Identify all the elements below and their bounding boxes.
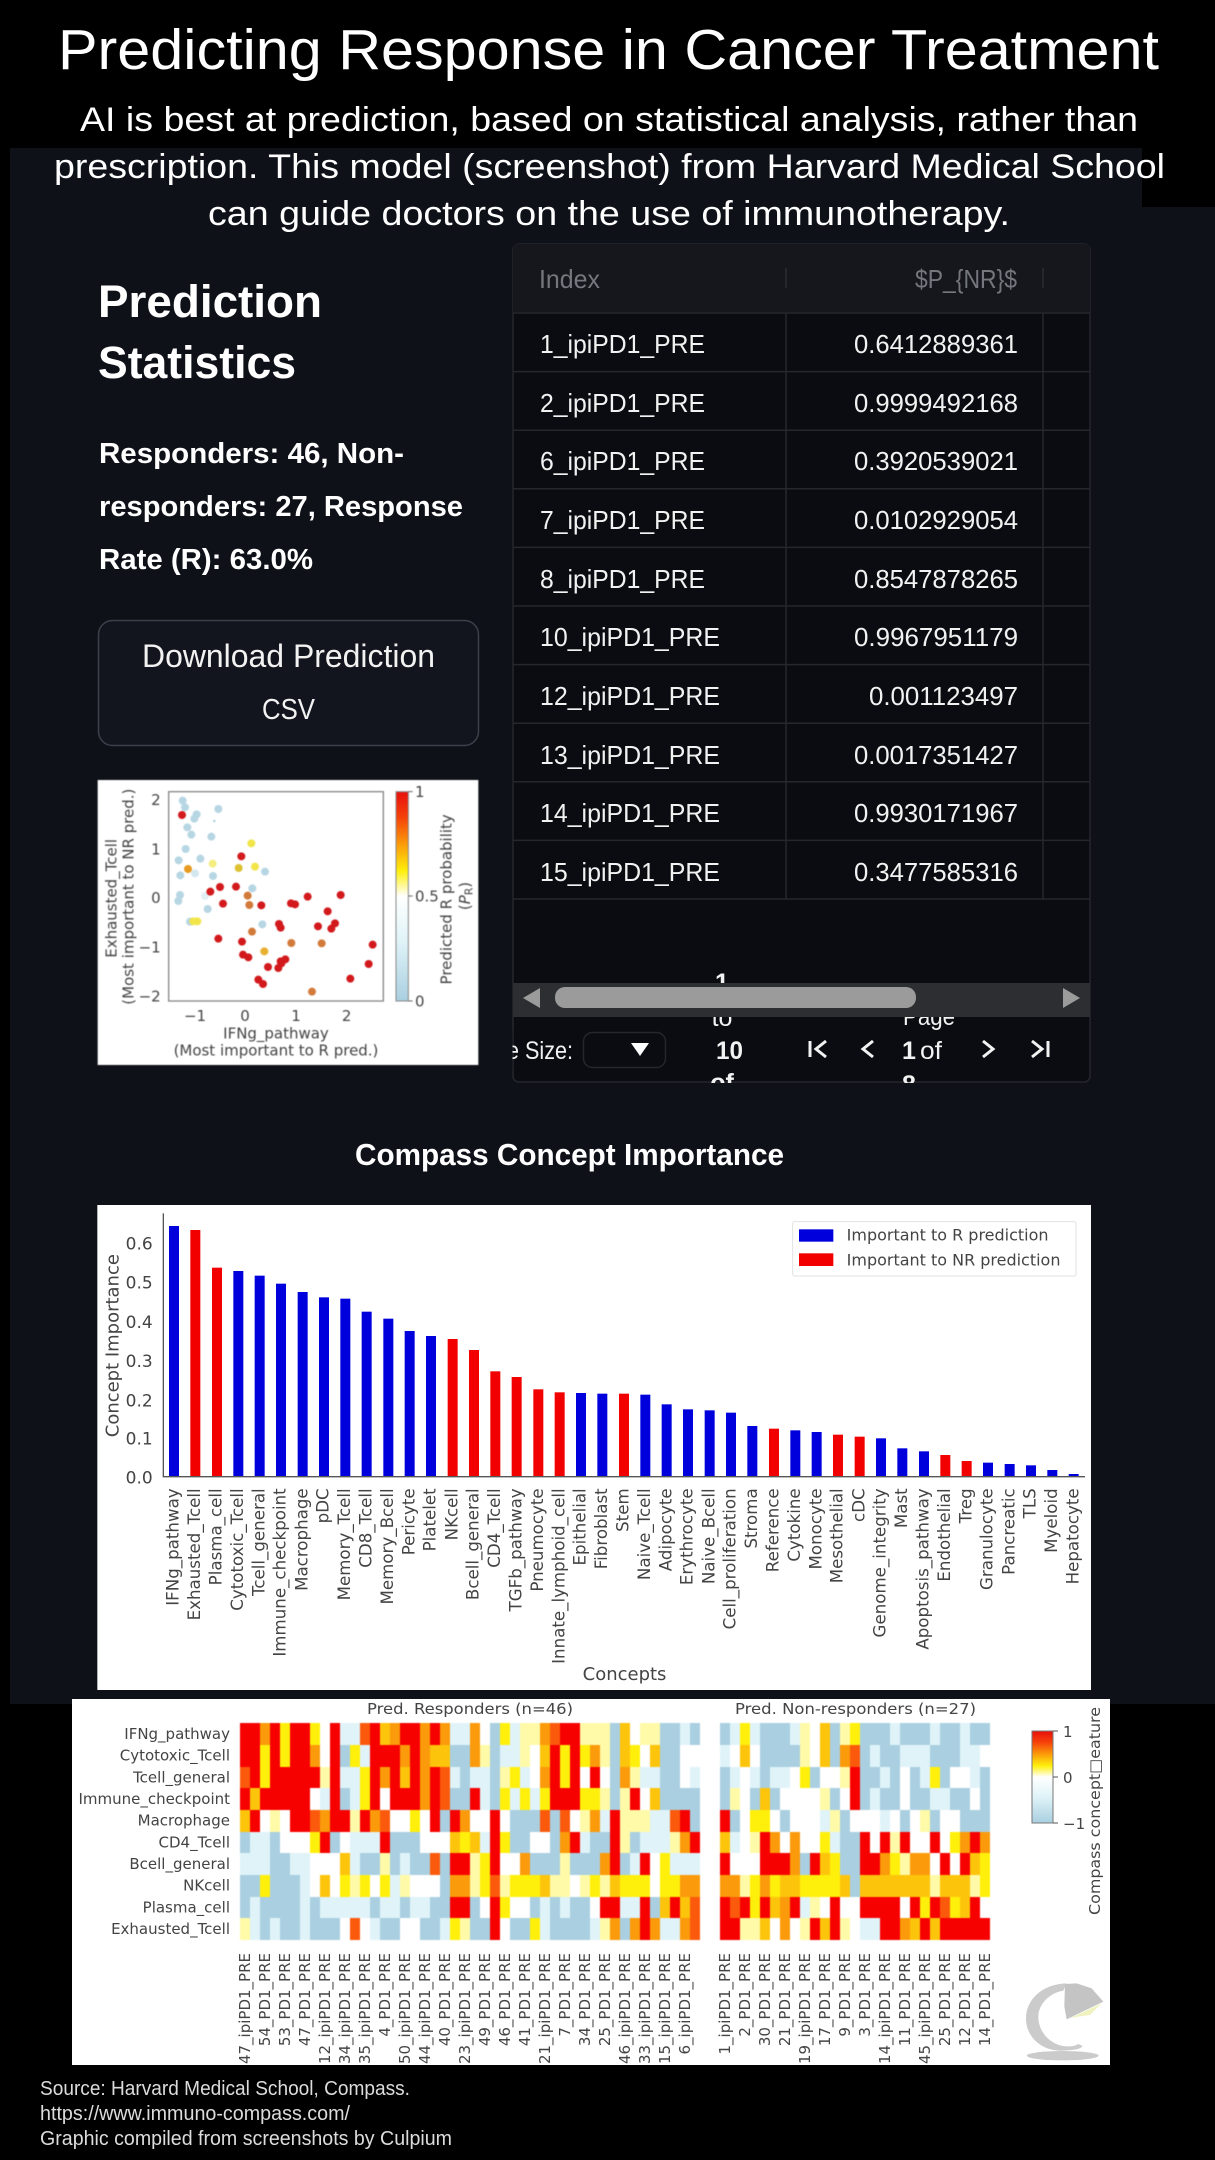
concept labels: Cytotoxic_Tcell	[228, 1488, 248, 1611]
scatter axis tick labels: 0	[240, 1007, 250, 1025]
heatmap background and labels	[72, 1699, 1110, 2065]
pagination controls: of	[920, 1037, 942, 1065]
heatmap column labels: responders: 34_PD1_PRE	[576, 1953, 595, 2046]
heatmap group titles	[367, 1700, 976, 1718]
source footer: Graphic compiled from screenshots by Culpium	[40, 2128, 452, 2150]
heatmap column labels: responders: 50_ipiPD1_PRE	[396, 1953, 415, 2064]
button: download prediction csv	[98, 620, 478, 746]
concept labels: Macrophage	[292, 1488, 311, 1591]
pagination controls: 8	[902, 1071, 916, 1099]
bar chart axes: Concept Importance	[102, 1254, 123, 1437]
source footer: https://www.immuno-compass.com/	[40, 2103, 350, 2125]
heatmap: predicted responders	[239, 1722, 701, 1941]
pagination controls: e Size:	[507, 1037, 573, 1065]
concept labels: Pneumocyte	[528, 1488, 547, 1592]
concept labels: Granulocyte	[978, 1488, 997, 1590]
heading: compass concept importance: Compass Concept Importance	[355, 1137, 784, 1172]
concept labels: IFNg_pathway	[164, 1488, 184, 1606]
concept labels: pDC	[314, 1488, 333, 1523]
concept labels: Hepatocyte	[1063, 1488, 1082, 1584]
heatmap row labels: Macrophage	[138, 1812, 230, 1830]
heatmap row labels: Plasma_cell	[143, 1898, 230, 1917]
scatter axis tick labels: 1	[151, 840, 161, 858]
table rows: 6_ipiPD1_PRE	[540, 446, 705, 476]
heatmap row labels: Bcell_general	[129, 1855, 230, 1874]
bar chart axes: 0.3	[126, 1352, 153, 1372]
heading: prediction statistics: Statistics	[98, 337, 296, 388]
table panel: prediction values	[500, 244, 1090, 1099]
scatter colorbar: R	[463, 887, 476, 895]
subtitle: AI is best at prediction, based on statistical analysis, rather than	[80, 101, 1138, 139]
heatmap column labels: non-responders: 14_ipiPD1_PRE	[876, 1953, 895, 2064]
concept labels: Endothelial	[935, 1488, 954, 1582]
bar chart axes: 0.5	[126, 1274, 153, 1294]
heatmap column labels: responders: 12_ipiPD1_PRE	[316, 1953, 335, 2064]
heatmap column labels: responders: 40_PD1_PRE	[436, 1953, 455, 2046]
concept labels: Mesothelial	[828, 1488, 847, 1583]
table rows: 0.3477585316	[854, 857, 1018, 887]
table header: Index	[539, 264, 600, 294]
heatmap column labels: non-responders: 19_ipiPD1_PRE	[796, 1953, 815, 2064]
black corner block top right	[1142, 148, 1215, 207]
heatmap row labels: NKcell	[183, 1877, 230, 1895]
scatter colorbar: (P	[456, 895, 474, 910]
heatmap column labels: responders: 33_ipiPD1_PRE	[636, 1953, 655, 2064]
bar chart axes: 0.4	[126, 1313, 153, 1333]
heatmap column labels: non-responders: 25_PD1_PRE	[936, 1953, 955, 2046]
concept labels: Plasma_cell	[207, 1488, 227, 1585]
scatter colorbar: )	[456, 882, 474, 888]
concept labels: CD4_Tcell	[485, 1488, 505, 1568]
concept labels: Naive_Bcell	[699, 1488, 719, 1584]
pagination controls: 1	[902, 1037, 916, 1065]
heatmap column labels: responders	[236, 1953, 695, 2064]
concept labels: Epithelial	[571, 1488, 590, 1565]
table rows: 1_ipiPD1_PRE	[540, 329, 705, 359]
table header	[513, 244, 1090, 313]
table rows: 7_ipiPD1_PRE	[540, 505, 705, 535]
heatmap column labels: responders: 35_ipiPD1_PRE	[356, 1953, 375, 2064]
heatmap column labels: non-responders: 30_PD1_PRE	[756, 1953, 775, 2046]
heading: prediction statistics: Prediction	[98, 276, 322, 327]
scatter axis tick labels: 1	[291, 1007, 301, 1025]
table rows: 0.8547878265	[854, 564, 1018, 594]
heatmap colorbar: 0	[1063, 1769, 1073, 1787]
concept labels: Pancreatic	[999, 1488, 1018, 1575]
text block: response statistics: Rate (R): 63.0%	[99, 544, 313, 576]
heatmap column labels: non-responders: 1_ipiPD1_PRE	[716, 1953, 735, 2054]
concept labels: Myeloid	[1042, 1488, 1061, 1553]
heatmap column labels: responders: 41_PD1_PRE	[516, 1953, 535, 2046]
bar chart legend	[793, 1222, 1076, 1276]
button: download prediction csv: Download Prediction	[142, 638, 435, 674]
concept labels: TGFb_pathway	[506, 1488, 526, 1612]
text block: response statistics	[99, 438, 463, 576]
concept labels: Immune_checkpoint	[271, 1488, 291, 1657]
heatmap row labels: IFNg_pathway	[124, 1725, 230, 1744]
heatmap column labels: non-responders: 11_PD1_PRE	[896, 1953, 915, 2046]
heatmap row labels: Cytotoxic_Tcell	[120, 1747, 230, 1766]
table rows: 0.3920539021	[854, 446, 1018, 476]
table rows: 8_ipiPD1_PRE	[540, 564, 705, 594]
heatmap group titles: Pred. Non-responders (n=27)	[735, 1700, 976, 1718]
concept labels: Reference	[764, 1488, 783, 1572]
table rows: 15_ipiPD1_PRE	[540, 857, 720, 887]
pagination controls: to	[712, 1004, 732, 1032]
subtitle: prescription. This model (screenshot) from Harvard Medical School	[54, 148, 1165, 186]
scatter colorbar	[396, 783, 476, 1010]
text block: response statistics: responders: 27, Response	[99, 491, 463, 523]
concept labels: Bcell_general	[464, 1488, 484, 1600]
scatter axis tick labels: −1	[184, 1007, 206, 1025]
heatmap column labels: non-responders: 14_PD1_PRE	[976, 1953, 995, 2046]
scatter axis tick labels: −2	[139, 988, 161, 1006]
concept labels: Apoptosis_pathway	[914, 1488, 934, 1650]
concept labels: Fibroblast	[592, 1488, 611, 1569]
concept labels: Stem	[614, 1488, 633, 1532]
table rows: 0.9930171967	[854, 798, 1018, 828]
heatmap column labels: responders: 54_PD1_PRE	[256, 1953, 275, 2046]
heatmap column labels: non-responders: 21_PD1_PRE	[776, 1953, 795, 2046]
pagination controls: of	[710, 1069, 734, 1097]
pagination controls: 10	[716, 1037, 743, 1065]
heatmap column labels: responders: 47_ipiPD1_PRE	[236, 1953, 255, 2064]
table rows: 0.9999492168	[854, 388, 1018, 418]
table rows	[540, 329, 1018, 887]
table rows: 12_ipiPD1_PRE	[540, 681, 720, 711]
concept labels: Stroma	[742, 1488, 761, 1549]
heatmap column labels: responders: 7_PD1_PRE	[556, 1953, 575, 2037]
heatmap row labels	[78, 1725, 230, 1939]
heatmap column labels: responders: 6_ipiPD1_PRE	[676, 1953, 695, 2054]
pagination controls	[500, 969, 1090, 1099]
heatmap column labels: non-responders: 12_PD1_PRE	[956, 1953, 975, 2046]
heatmap column labels: responders: 23_ipiPD1_PRE	[456, 1953, 475, 2064]
heatmap group titles: Pred. Responders (n=46)	[367, 1700, 573, 1718]
scatter axis tick labels: −1	[139, 939, 161, 957]
scatter colorbar: 0	[415, 992, 425, 1010]
scatter axis tick labels: 2	[342, 1007, 351, 1025]
table rows: 2_ipiPD1_PRE	[540, 388, 705, 418]
scatter colorbar: 1	[415, 783, 425, 801]
scatter axis titles	[103, 789, 378, 1060]
bar chart axes	[102, 1213, 1085, 1685]
scatter axis titles: Exhausted_Tcell	[103, 839, 122, 958]
heatmap column labels: responders: 25_PD1_PRE	[596, 1953, 615, 2046]
concept labels: Treg	[956, 1488, 975, 1524]
heatmap colorbar: 1	[1063, 1723, 1073, 1741]
pagination controls: Page	[903, 1003, 955, 1031]
concept labels: Memory_Tcell	[335, 1488, 355, 1600]
scatter axis tick labels: 0	[151, 889, 161, 907]
text block: response statistics: Responders: 46, Non-	[99, 438, 404, 470]
heatmap colorbar	[1032, 1707, 1104, 1915]
heatmap column labels: responders: 46_PD1_PRE	[496, 1953, 515, 2046]
heatmap column labels: non-responders: 2_PD1_PRE	[736, 1953, 755, 2037]
heatmap column labels: non-responders: 3_PD1_PRE	[856, 1953, 875, 2037]
heatmap column labels: responders: 44_ipiPD1_PRE	[416, 1953, 435, 2064]
concept labels: Cytokine	[785, 1488, 804, 1562]
concept labels: cDC	[849, 1488, 868, 1522]
heatmap column labels: non-responders: 45_ipiPD1_PRE	[916, 1953, 935, 2064]
bar chart axes: Concepts	[583, 1664, 666, 1685]
icon: desk lamp logo	[1026, 1983, 1103, 2060]
heading: prediction statistics	[98, 276, 322, 388]
scatter axis titles: (Most important to R pred.)	[174, 1042, 378, 1060]
dark dashboard background panel	[10, 148, 1215, 1704]
concept labels: Monocyte	[806, 1488, 825, 1569]
button: download prediction csv: CSV	[262, 694, 316, 726]
concept labels: Cell_proliferation	[721, 1488, 741, 1629]
concept labels: CD8_Tcell	[356, 1488, 376, 1568]
bar chart axes: 0.1	[126, 1430, 153, 1450]
heatmap column labels: responders: 53_PD1_PRE	[276, 1953, 295, 2046]
bars	[169, 1226, 1079, 1477]
concept labels: TLS	[1021, 1488, 1040, 1519]
bar chart legend: Important to R prediction	[847, 1226, 1049, 1245]
table header: $P_{NR}$	[915, 264, 1017, 294]
heatmap column labels: responders: 47_PD1_PRE	[296, 1953, 315, 2046]
source footer	[40, 2078, 452, 2150]
heatmap column labels: responders: 34_ipiPD1_PRE	[336, 1953, 355, 2064]
heatmap column labels: non-responders: 9_PD1_PRE	[836, 1953, 855, 2037]
bar chart legend: Important to NR prediction	[847, 1251, 1060, 1270]
bar chart axes: 0.0	[126, 1469, 153, 1489]
subtitle: can guide doctors on the use of immunotherapy.	[208, 195, 1010, 233]
subtitle	[54, 101, 1165, 233]
scatter colorbar: 0.5	[415, 887, 439, 905]
scatter axis tick labels: 2	[151, 791, 161, 809]
table rows: 0.0017351427	[854, 740, 1018, 770]
concept labels: Genome_integrity	[871, 1488, 891, 1637]
concept labels: Naive_Tcell	[635, 1488, 655, 1580]
concept labels: Mast	[892, 1488, 911, 1528]
concept labels: Erythrocyte	[678, 1488, 697, 1585]
scatter axis titles: IFNg_pathway	[223, 1024, 329, 1043]
title: Predicting Response in Cancer Treatment	[58, 18, 1159, 82]
table rows: 10_ipiPD1_PRE	[540, 622, 720, 652]
concept labels: Pericyte	[399, 1488, 418, 1555]
concept labels: Innate_lymphoid_cell	[549, 1488, 569, 1664]
concept labels: Adipocyte	[656, 1488, 675, 1571]
heatmap colorbar: −1	[1063, 1815, 1085, 1833]
table rows: 0.9967951179	[854, 622, 1018, 652]
concept labels: NKcell	[442, 1488, 461, 1540]
scatter colorbar: Predicted R probability	[438, 814, 456, 984]
scatter plot: predicted R probability	[98, 780, 478, 1065]
bar chart axes: 0.6	[126, 1235, 153, 1255]
concept labels: Platelet	[421, 1488, 440, 1551]
concept labels: Exhausted_Tcell	[185, 1488, 205, 1620]
concept labels: Tcell_general	[249, 1488, 269, 1597]
source footer: Source: Harvard Medical School, Compass.	[40, 2078, 410, 2100]
table rows: 0.0102929054	[854, 505, 1018, 535]
scatter points	[174, 797, 377, 996]
table rows: 0.6412889361	[854, 329, 1018, 359]
scatter axis tick labels	[139, 791, 351, 1025]
heatmap row labels: Exhausted_Tcell	[111, 1920, 230, 1939]
heatmap column labels: responders: 21_ipiPD1_PRE	[536, 1953, 555, 2064]
heatmap column labels: responders: 46_ipiPD1_PRE	[616, 1953, 635, 2064]
heatmap column labels: responders: 49_PD1_PRE	[476, 1953, 495, 2046]
heatmap column labels: responders: 15_ipiPD1_PRE	[656, 1953, 675, 2064]
bar chart axes: 0.2	[126, 1391, 153, 1411]
horizontal scrollbar	[513, 983, 1090, 1017]
heatmap row labels: CD4_Tcell	[158, 1833, 230, 1852]
heatmap row labels: Immune_checkpoint	[78, 1790, 230, 1809]
heatmap: predicted non-responders	[719, 1722, 991, 1941]
concept labels: Memory_Bcell	[378, 1488, 398, 1604]
concept labels	[164, 1488, 1082, 1664]
table rows: 14_ipiPD1_PRE	[540, 798, 720, 828]
pagination controls: 1	[715, 969, 729, 997]
heatmap column labels: non-responders: 17_PD1_PRE	[816, 1953, 835, 2046]
heatmap column labels: non-responders	[716, 1953, 995, 2064]
table rows: 0.001123497	[869, 681, 1018, 711]
scatter axis titles: (Most important to NR pred.)	[119, 789, 137, 1005]
bar chart: concept importance	[97, 1205, 1091, 1690]
heatmap column labels: responders: 4_PD1_PRE	[376, 1953, 395, 2037]
heatmap row labels: Tcell_general	[132, 1768, 230, 1787]
heatmap colorbar: Compass concept□eature	[1086, 1707, 1104, 1915]
table rows: 13_ipiPD1_PRE	[540, 740, 720, 770]
